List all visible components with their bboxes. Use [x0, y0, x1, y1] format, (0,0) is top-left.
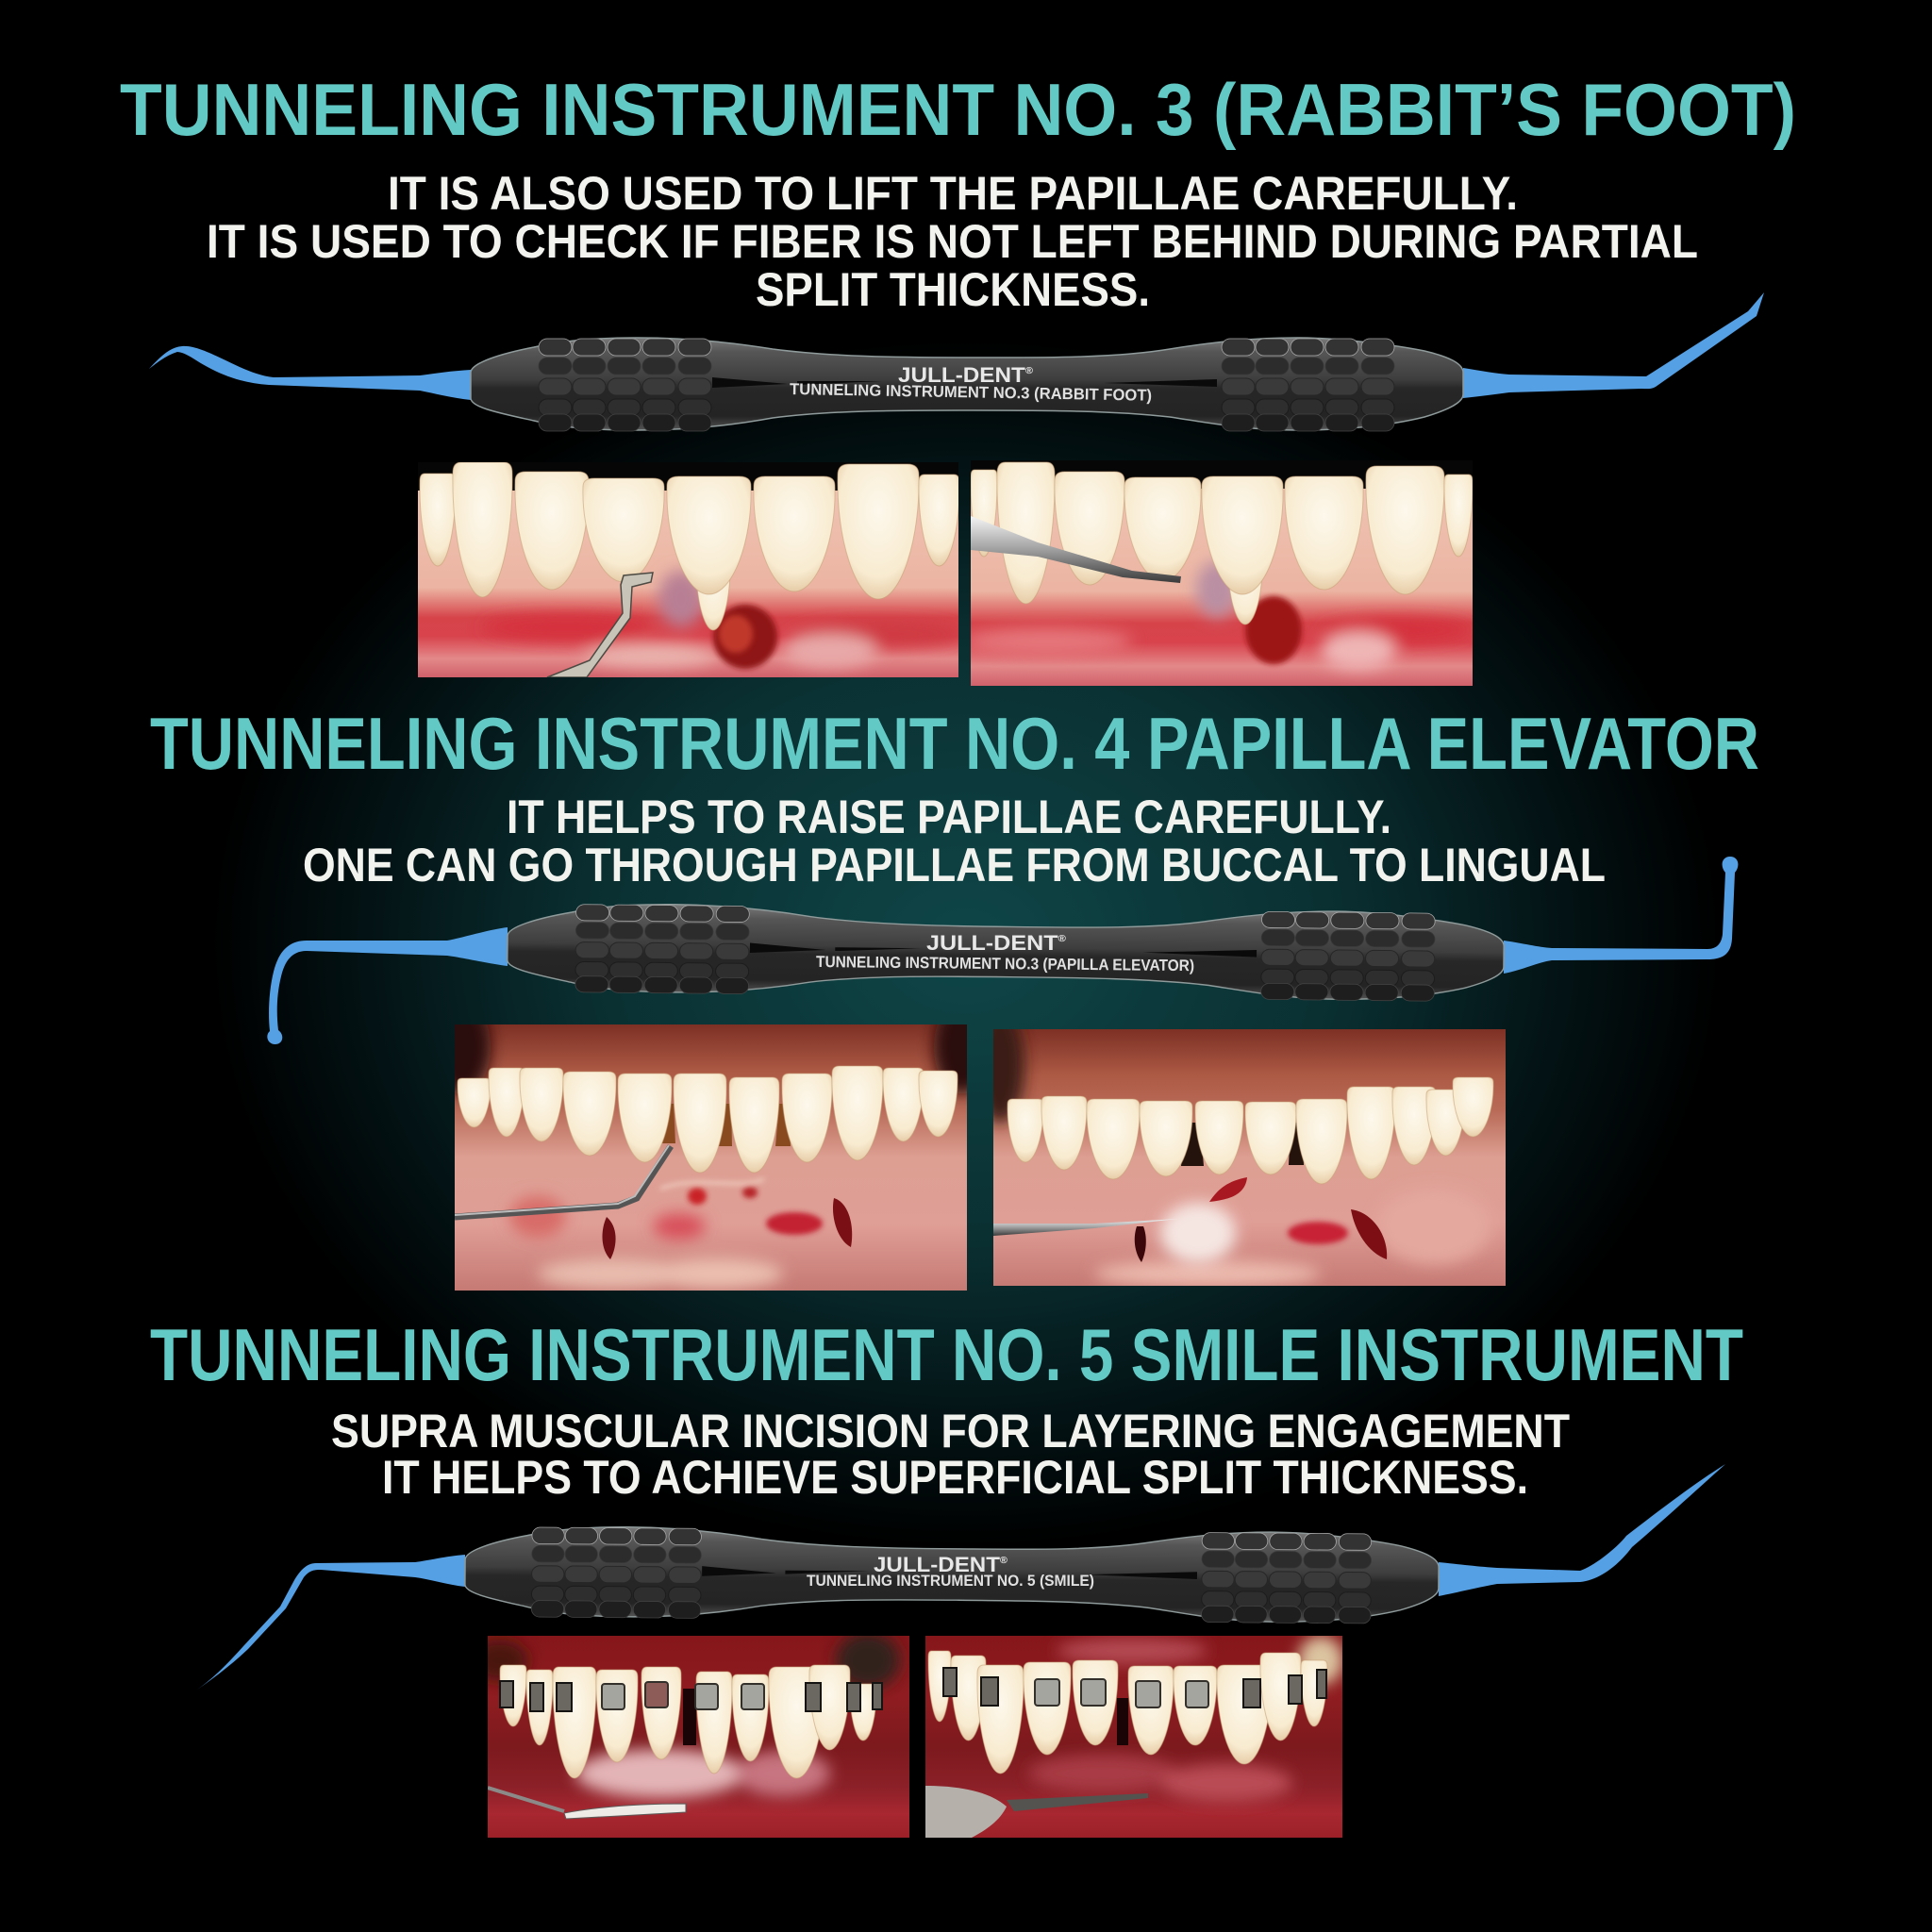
- text block: instrument no. 5 description: [331, 1405, 1570, 1504]
- text block: instrument no. 3 description: IT IS ALSO USED TO LIFT THE PAPILLAE CAREFULLY.: [388, 167, 1518, 220]
- instrument: papilla elevator: ®: [1058, 934, 1067, 944]
- text block: instrument no. 3 description: SPLIT THICKNESS.: [756, 263, 1150, 316]
- instrument: rabbit foot: TUNNELING INSTRUMENT NO.3 (RABBIT FOOT): [790, 380, 1152, 405]
- section: instrument no. 4: [150, 702, 1759, 1291]
- text block: instrument no. 4 description: ONE CAN GO THROUGH PAPILLAE FROM BUCCAL TO LINGUAL: [303, 839, 1606, 891]
- text block: instrument no. 5 description: SUPRA MUSCULAR INCISION FOR LAYERING ENGAGEMENT: [331, 1405, 1570, 1457]
- instrument: smile: JULL-DENT: [874, 1553, 989, 1576]
- text block: instrument no. 3 description: IT IS USED TO CHECK IF FIBER IS NOT LEFT BEHIND DURING PARTIAL: [207, 215, 1698, 268]
- text block: instrument no. 3 description: [207, 167, 1698, 316]
- instrument: rabbit foot: ®: [1025, 366, 1034, 376]
- section: instrument no. 3: [120, 68, 1796, 686]
- photo: probe lifting papilla, left: [418, 462, 958, 677]
- instrument: rabbit foot: [149, 292, 1764, 431]
- photo: smile instrument with braces, left: [488, 1636, 909, 1838]
- instrument: smile: ®: [1000, 1556, 1008, 1566]
- photo: elevator at papilla, right: [993, 1029, 1506, 1286]
- instrument: papilla elevator: JULL-DENT: [926, 931, 1041, 955]
- text block: instrument no. 4 description: [303, 791, 1606, 891]
- photo: smile instrument with braces, right: [925, 1636, 1342, 1838]
- heading: instrument no. 3: TUNNELING INSTRUMENT NO. 3 (RABBIT’S FOOT): [120, 68, 1796, 151]
- text block: instrument no. 4 description: IT HELPS TO RAISE PAPILLAE CAREFULLY.: [507, 791, 1391, 843]
- photo: elevator at papilla, left: [455, 1024, 967, 1291]
- instrument: papilla elevator: [267, 857, 1738, 1044]
- instrument: rabbit foot: JULL-DENT: [898, 363, 1013, 387]
- photo: probe lifting papilla, right: [971, 460, 1473, 686]
- section: instrument no. 5: [150, 1313, 1743, 1838]
- instrument: smile: [197, 1464, 1725, 1690]
- instrument: smile: TUNNELING INSTRUMENT NO. 5 (SMILE): [807, 1572, 1094, 1590]
- instrument: papilla elevator: TUNNELING INSTRUMENT NO.3 (PAPILLA ELEVATOR): [816, 953, 1194, 974]
- text block: instrument no. 5 description: IT HELPS TO ACHIEVE SUPERFICIAL SPLIT THICKNESS.: [382, 1451, 1528, 1504]
